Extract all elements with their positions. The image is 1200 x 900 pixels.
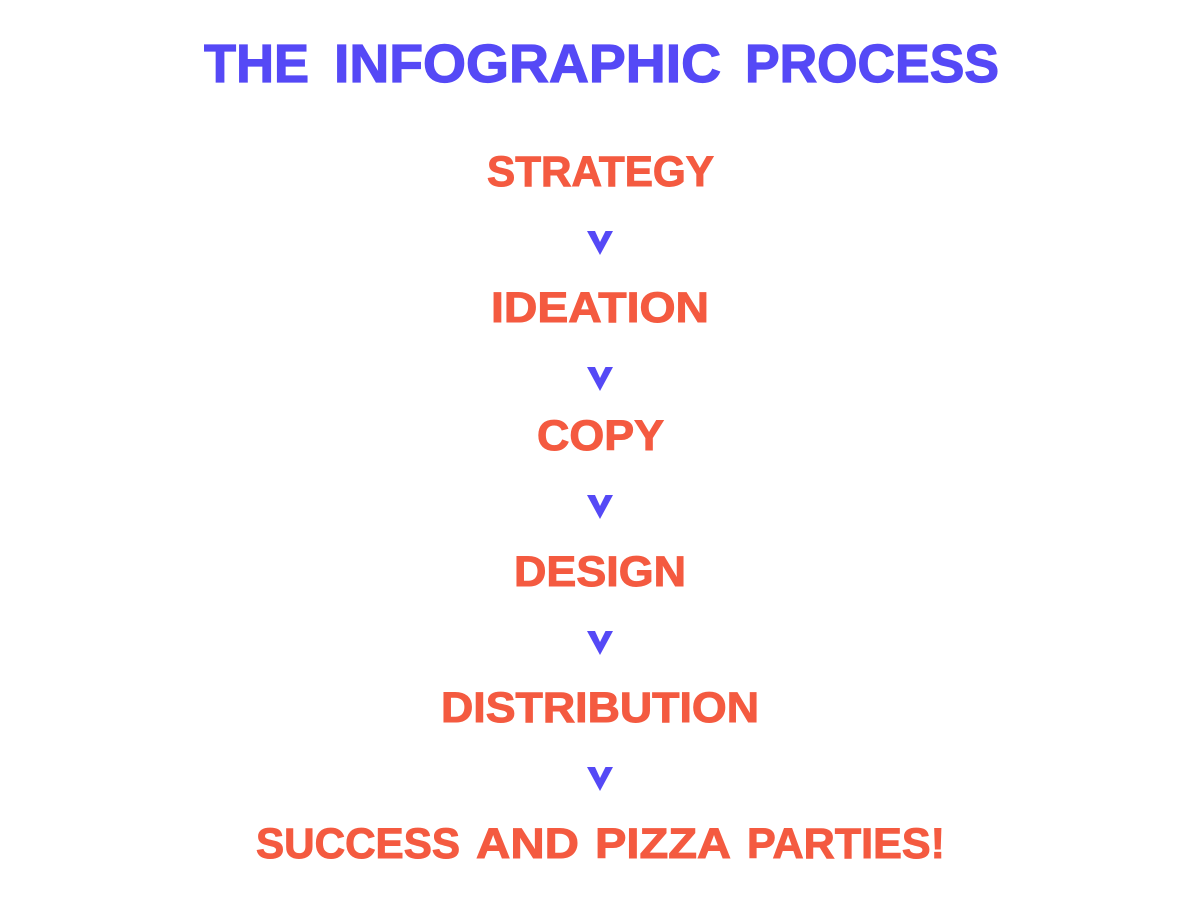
step: distribution: DISTRIBUTION [441,684,759,732]
step: success and pizza parties: SUCCESS [256,820,460,868]
step: ideation: IDEATION [491,284,709,332]
title: INFOGRAPHIC [334,34,721,94]
step: success and pizza parties: AND [476,820,579,868]
step: copy: COPY [537,412,664,460]
step: success and pizza parties: PARTIES! [747,820,945,868]
step: success and pizza parties [256,820,945,868]
title: PROCESS [745,34,999,94]
arrow: strategy to ideation [587,231,613,255]
step: success and pizza parties: PIZZA [595,820,731,868]
step: design: DESIGN [514,548,686,596]
step: strategy: STRATEGY [487,148,714,196]
arrow: design to distribution [587,631,613,655]
title: THE [204,34,309,94]
arrow: distribution to success [587,767,613,791]
title [204,34,999,94]
arrow: ideation to copy [587,367,613,391]
arrow: copy to design [587,495,613,519]
